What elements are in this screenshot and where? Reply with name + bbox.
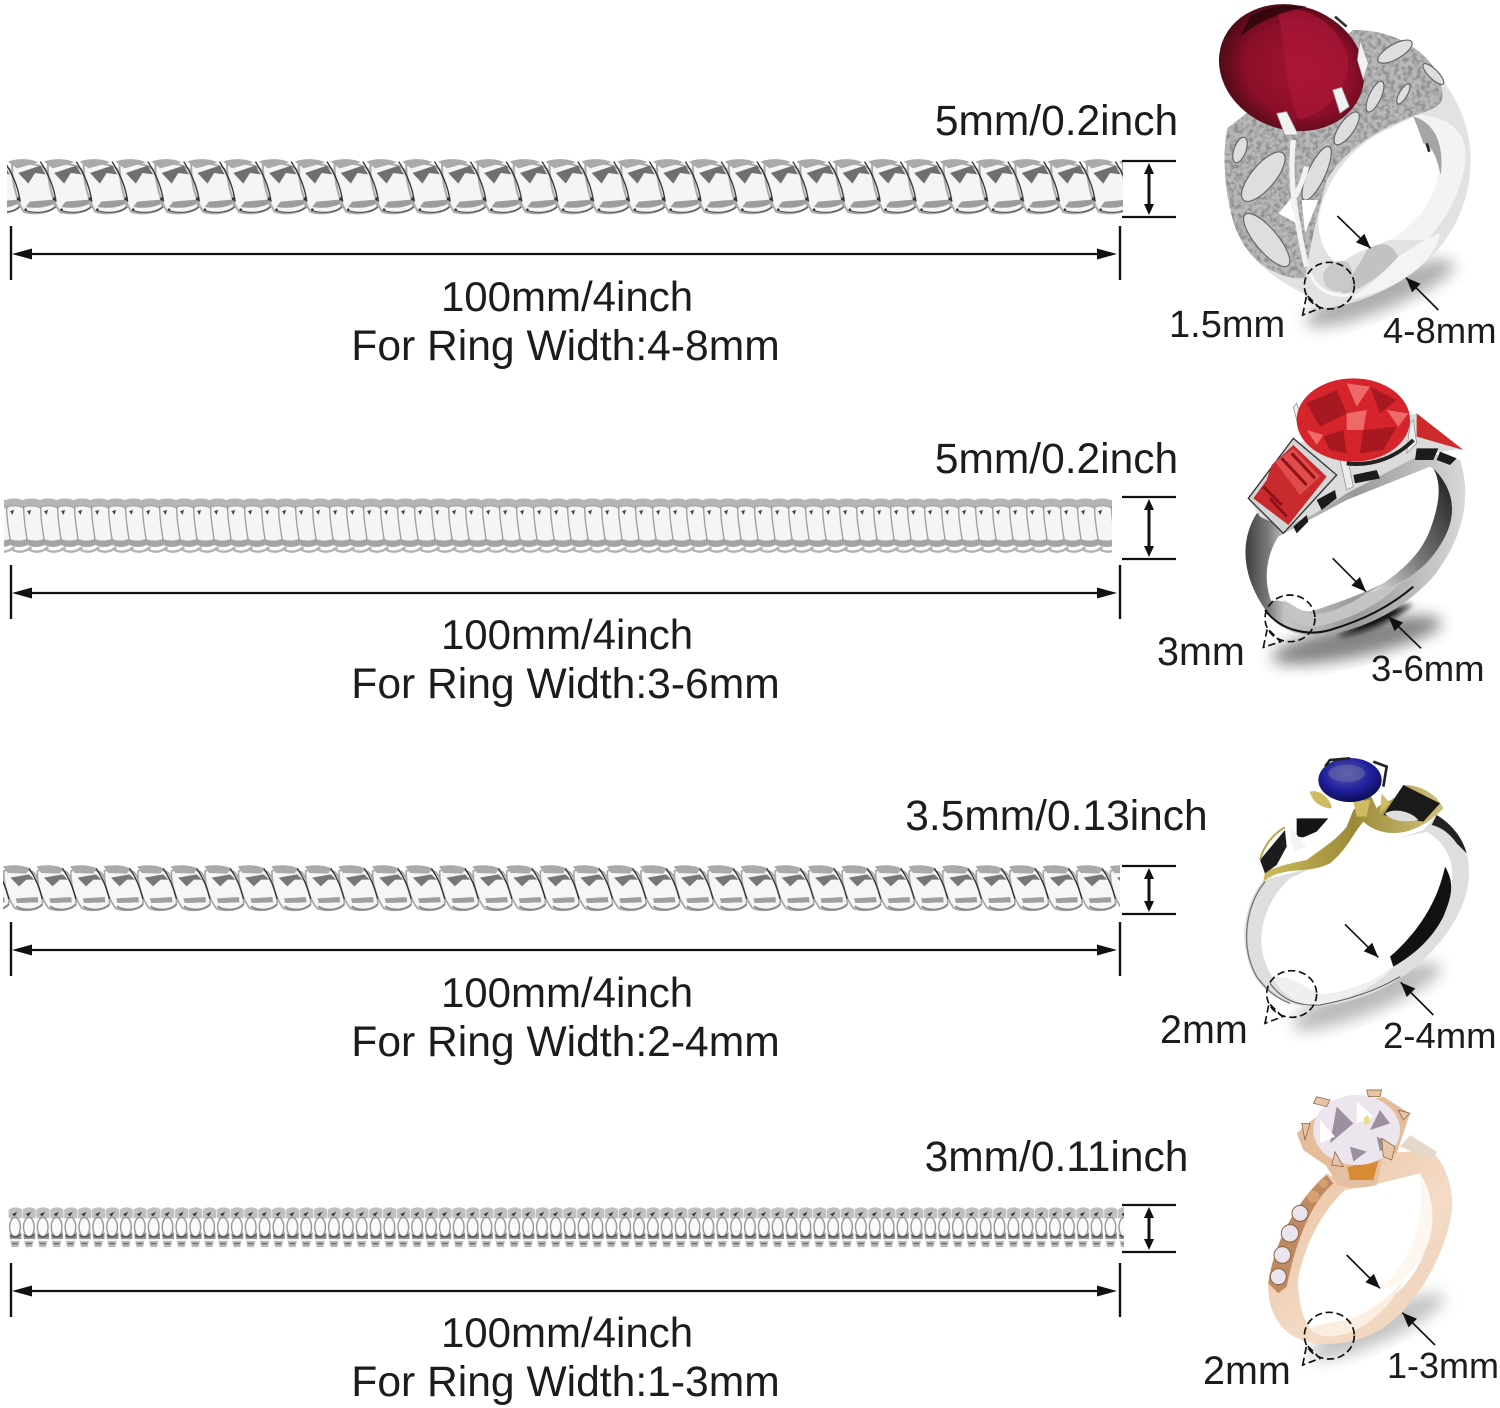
spiral coil 1 [7,157,1123,217]
length dimension arrow [11,1263,1120,1317]
height dimension marker [1122,1205,1176,1252]
ring width label: For Ring Width:1-3mm [351,1358,780,1406]
length dimension arrow [11,565,1120,619]
ring width label: For Ring Width:3-6mm [351,660,780,708]
height dimension marker [1122,866,1176,914]
ring 2: gunmetal ring with red stones [1245,378,1465,674]
width label: 3mm/0.11inch [925,1134,1188,1181]
width label: 5mm/0.2inch [935,436,1178,483]
row 2: 5mm wide adjuster for 3-6mm rings [4,436,1178,708]
row 1: 5mm wide adjuster for 4-8mm rings [7,98,1178,370]
label: 2mm (ring 3): 2mm [1160,1008,1248,1052]
row 4: 3mm wide adjuster for 1-3mm rings [8,1134,1188,1406]
ring width label: For Ring Width:2-4mm [351,1018,780,1066]
length label: 100mm/4inch [441,969,693,1016]
label: 3mm: 3mm [1157,630,1245,674]
spiral coil 2 [4,498,1112,556]
ring 1: silver filigree ring with garnet cabochon [1201,0,1471,339]
ring 3: silver ring with sapphire and gold leaves [1244,758,1469,1042]
height dimension marker [1122,497,1176,559]
spiral coil 4 [8,1207,1124,1249]
label: 2mm (ring 4): 2mm [1203,1349,1291,1393]
height dimension marker [1122,161,1176,217]
length label: 100mm/4inch [441,1309,693,1356]
label: 1.5mm: 1.5mm [1169,304,1285,346]
label: 1-3mm: 1-3mm [1387,1345,1499,1386]
length label: 100mm/4inch [441,273,693,320]
ring 4: rose gold ring with diamond [1268,1090,1452,1371]
width label: 5mm/0.2inch [935,98,1178,145]
length dimension arrow [11,922,1120,976]
length dimension arrow [11,226,1120,280]
spiral coil 3 [3,865,1120,913]
length label: 100mm/4inch [441,611,693,658]
row 3: 3.5mm wide adjuster for 2-4mm rings [3,793,1208,1066]
label: 3-6mm: 3-6mm [1371,648,1485,689]
label: 2-4mm: 2-4mm [1383,1015,1497,1056]
ring width label: For Ring Width:4-8mm [351,322,780,370]
label: 4-8mm: 4-8mm [1383,310,1497,351]
width label: 3.5mm/0.13inch [905,793,1208,840]
